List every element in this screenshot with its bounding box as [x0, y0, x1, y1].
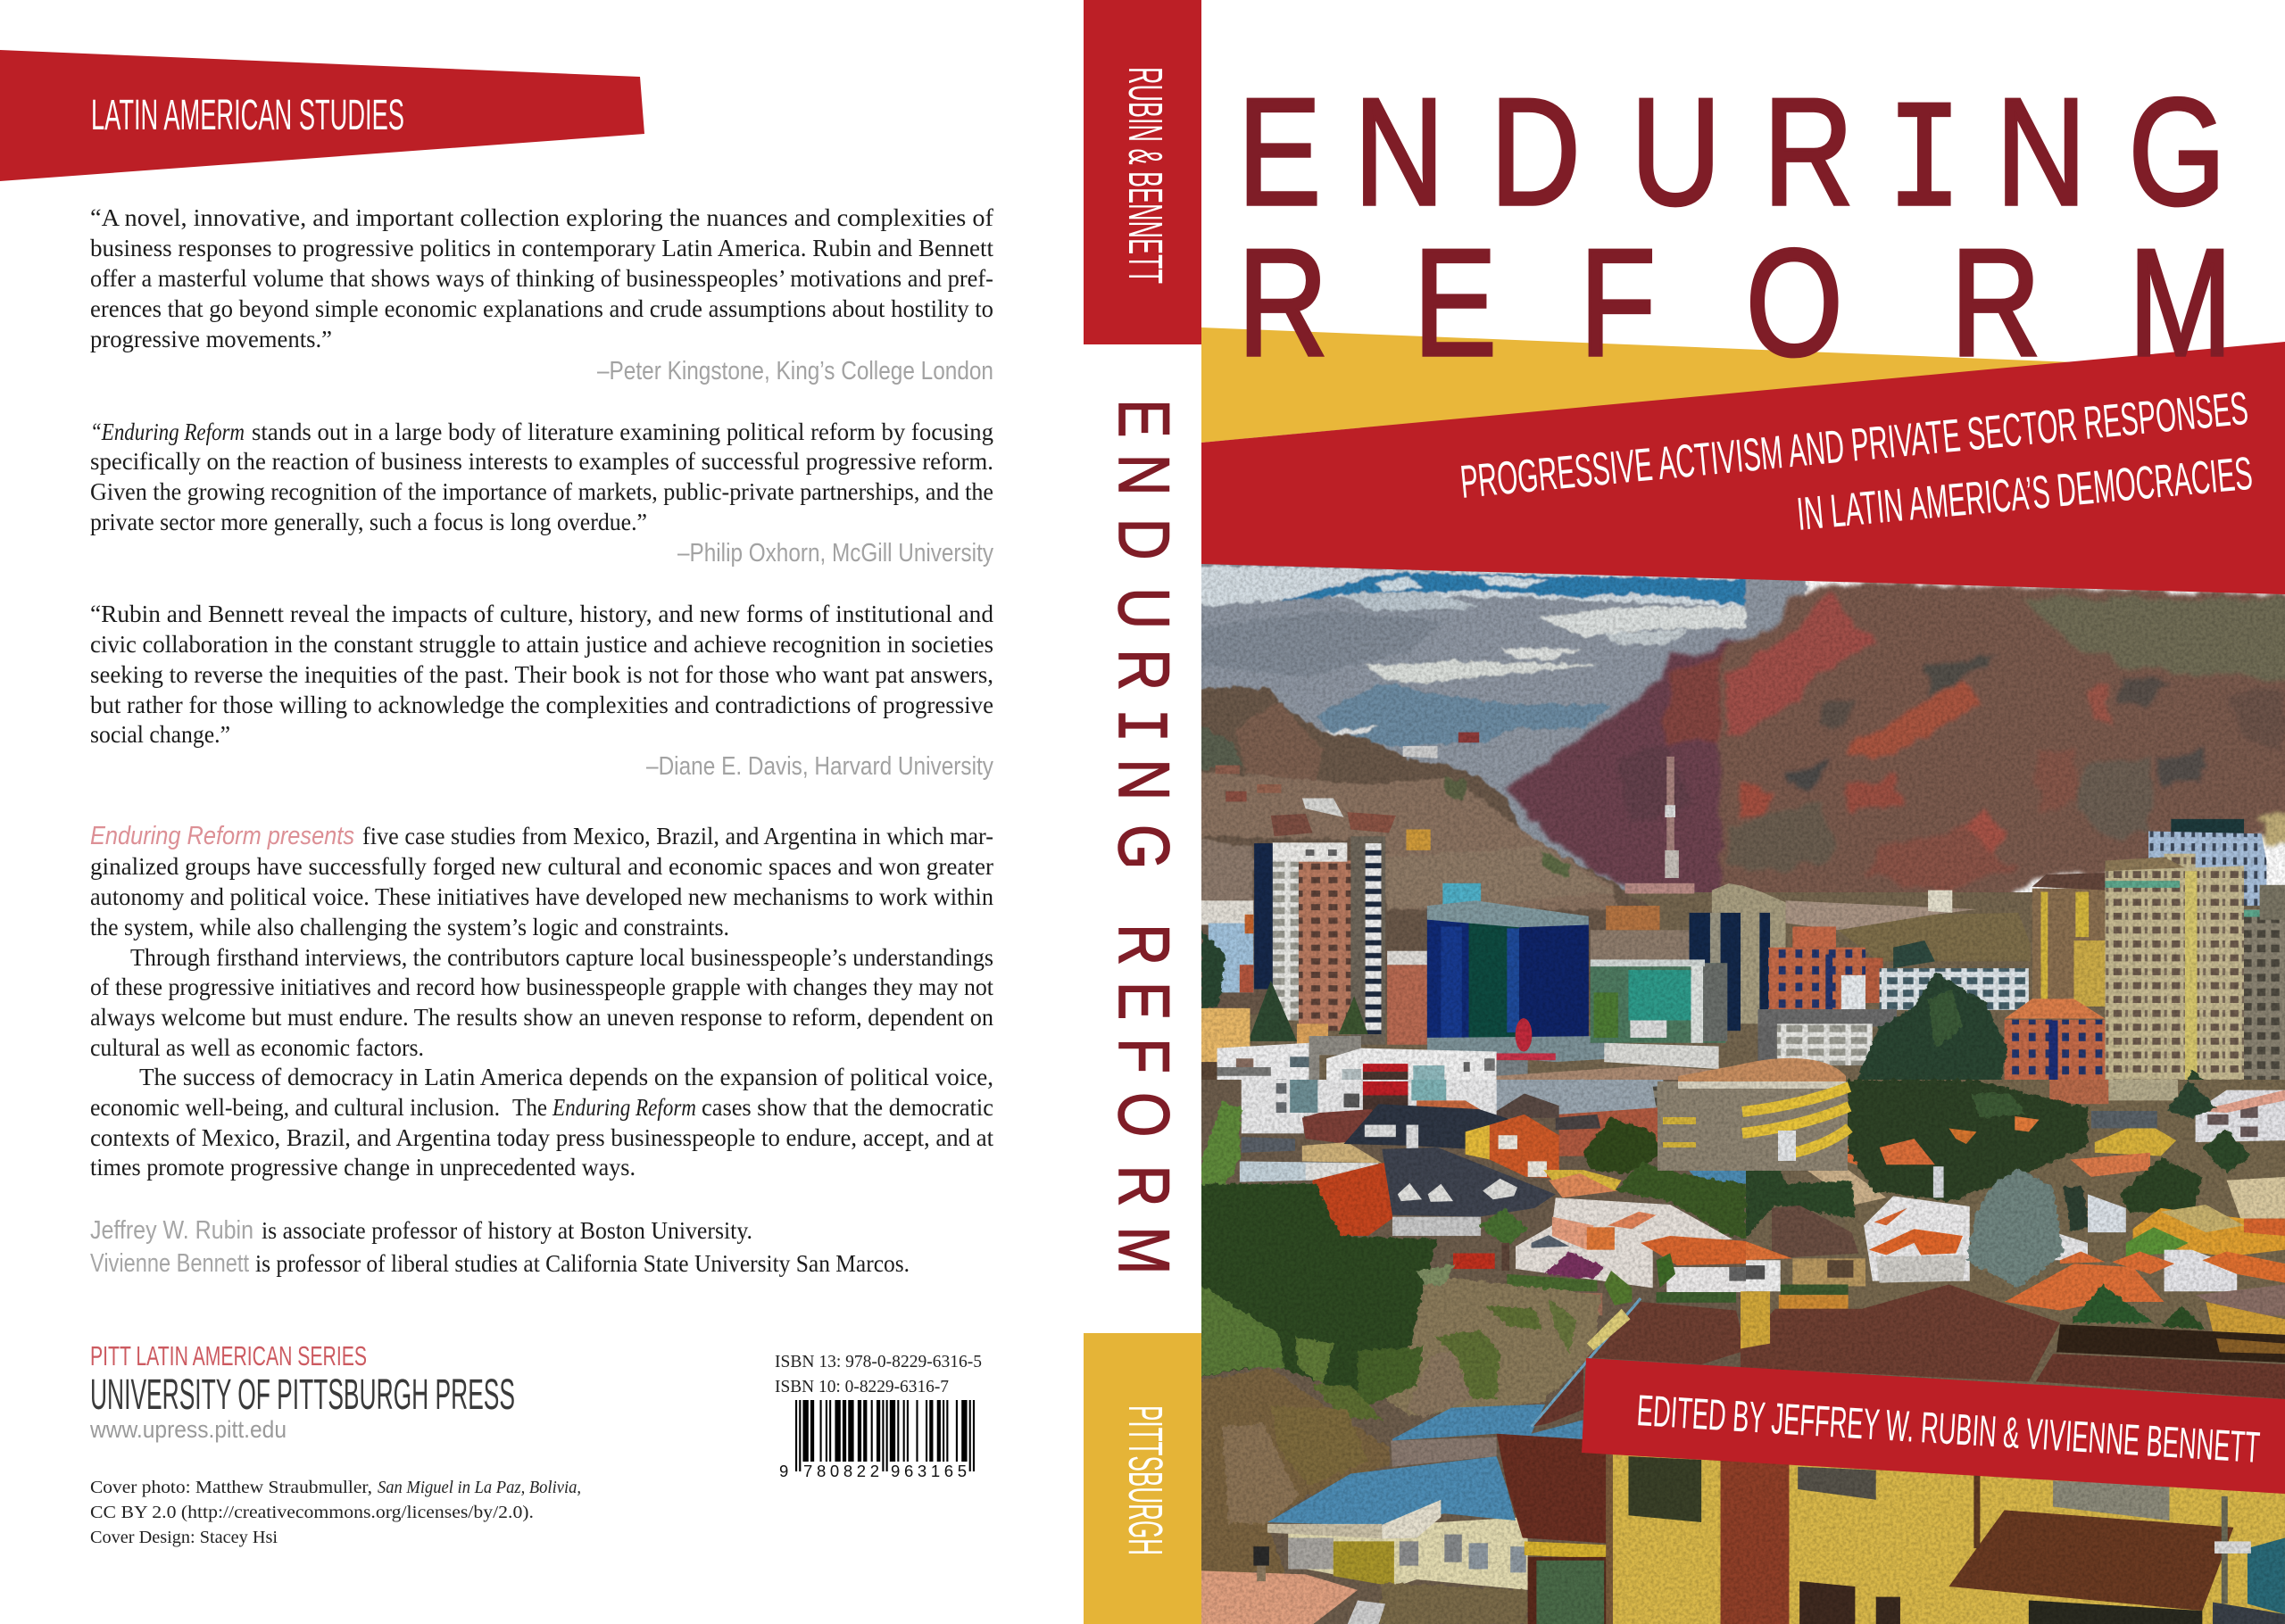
book description: of these progressive initiatives and record how businesspeople grapple with changes they may not: [90, 974, 993, 1000]
barcode: [779, 1400, 975, 1480]
base fill behind the city: [1201, 892, 2285, 1624]
hillside houses: [1216, 733, 1694, 893]
title: Enduring Reform: I: [1887, 78, 1962, 250]
panel: spine: [1084, 0, 1201, 1624]
quote 3: civic collaboration in the constant struggle to attain justice and achieve recognition in societies: [90, 631, 993, 658]
title: Enduring Reform: NG: [1996, 67, 2226, 237]
publisher block: www.upress.pitt.edu: [89, 1416, 287, 1443]
quote 3: but rather for those willing to acknowledge the complexities and contradictions of progressive: [90, 692, 993, 718]
spine title: NG REFORM: [1103, 758, 1184, 1274]
book description: five case studies from Mexico, Brazil, and Argentina in which mar-: [362, 823, 993, 849]
quote 1: erences that go beyond simple economic explanations and crude assumptions about hostility to: [90, 295, 993, 322]
quote 2: “Enduring Reform: [90, 418, 245, 445]
barcode: 780822: [803, 1462, 879, 1480]
quote 3: social change.”: [90, 721, 230, 748]
book description: Enduring Reform presents: [90, 822, 354, 850]
book description: times promote progressive change in unprecedented ways.: [90, 1154, 636, 1181]
yellow house wall: [1525, 1454, 1746, 1624]
green hillside: [1194, 1100, 1600, 1420]
panel: front cover: [1181, 67, 2285, 1624]
red mountain: [1503, 583, 2285, 913]
quote 1: offer a masterful volume that shows ways of thinking of businesspeoples’ motivations and pref-: [90, 265, 993, 292]
cover credits: Cover Design: Stacey Hsi: [90, 1528, 278, 1547]
title: Enduring Reform: [1238, 67, 2232, 388]
author bios: Vivienne Bennett: [90, 1249, 249, 1278]
book description: economic well-being, and cultural inclusion.: [90, 1094, 500, 1121]
title: Enduring Reform: REFORM: [1238, 218, 2232, 388]
publisher block: UNIVERSITY OF PITTSBURGH PRESS: [90, 1371, 515, 1419]
big house, bottom right: [1741, 1285, 2285, 1624]
blue-grey cypress tree: [1966, 1168, 2064, 1288]
orange roof, bottom left: [1201, 1546, 1358, 1624]
cover credits: Cover photo: Matthew Straubmuller,: [90, 1478, 372, 1497]
banner: Latin American Studies: LATIN AMERICAN STUDIES: [91, 92, 404, 139]
book description: always welcome but must endure. The results show an uneven response to reform, dependent on: [90, 1004, 993, 1031]
spine publisher block: [1084, 1333, 1201, 1624]
quote 1: business responses to progressive politics in contemporary Latin America. Rubin and Bennett: [90, 235, 993, 261]
spine author block: RUBIN & BENNETT: [1118, 67, 1172, 284]
quote 3: “Rubin and Bennett reveal the impacts of culture, history, and new forms of institutional and: [90, 601, 993, 627]
barcode: 9: [779, 1462, 788, 1480]
author bios: is professor of liberal studies at California State University San Marcos.: [255, 1250, 910, 1277]
quote 2: –Philip Oxhorn, McGill University: [677, 539, 993, 568]
ISBN numbers: ISBN 13: 978-0-8229-6316-5: [775, 1352, 982, 1371]
quote 1: “A novel, innovative, and important collection exploring the nuances and complexities of: [90, 204, 993, 231]
dark glass twin tower: [1690, 883, 1746, 1031]
photo grain texture: [1201, 562, 2285, 1624]
quote 3: –Diane E. Davis, Harvard University: [646, 752, 993, 781]
distant snowy mountains: [1201, 564, 1808, 892]
barcode: 963165: [891, 1462, 967, 1480]
radio tower: [1665, 757, 1679, 878]
quote 3: [90, 601, 993, 781]
publisher block: PITT LATIN AMERICAN SERIES: [90, 1340, 367, 1371]
book description: Enduring Reform: [552, 1094, 696, 1121]
book description: The: [512, 1094, 547, 1121]
yellow tower: [2032, 873, 2105, 1007]
pale blue building: [2148, 819, 2266, 906]
book description: [90, 822, 993, 1181]
blue glass building: [1427, 883, 1615, 1062]
lower neighbourhood, centre right: [1741, 1080, 2285, 1344]
quote 2: specifically on the reaction of business interests to examples of successful progressive reform.: [90, 448, 993, 475]
quote 2: [90, 418, 993, 568]
book description: cases show that the democratic: [702, 1094, 993, 1121]
yellow wedge: [1201, 327, 2075, 443]
panel: back cover: [0, 50, 993, 1547]
big tan tower: [2105, 854, 2244, 1117]
author bios: Jeffrey W. Rubin: [90, 1216, 253, 1245]
banner: Latin American Studies: [0, 50, 644, 181]
book description: Through firsthand interviews, the contributors capture local businesspeople’s understandings: [130, 944, 993, 971]
rotunda building with yellow balconies: [1658, 1058, 1849, 1171]
white low-rise buildings: [1201, 1036, 1746, 1117]
tree canopy: [1741, 1080, 2251, 1243]
spine author block: [1084, 0, 1201, 344]
book description: ginalized groups have successfully forged new cultural and economic spaces and won greater: [90, 853, 993, 880]
tall brick tower: [1254, 836, 1385, 1045]
quote 3: seeking to reverse the inequities of the past. Their book is not for those who want pat answers,: [90, 661, 993, 688]
eucalyptus tree: [1855, 972, 2220, 1117]
reflective green building: [1591, 959, 1727, 1043]
cover credits: CC BY 2.0 (http://creativecommons.org/licenses/by/2.0).: [90, 1503, 534, 1522]
cover credits: [90, 1478, 581, 1547]
author bios: is associate professor of history at Boston University.: [262, 1217, 752, 1244]
author bios: [90, 1216, 910, 1278]
book description: the system, while also challenging the system’s logic and constraints.: [90, 914, 729, 940]
quote 2: stands out in a large body of literature examining political reform by focusing: [252, 418, 993, 445]
cover credits: San Miguel in La Paz, Bolivia,: [378, 1478, 581, 1497]
quote 1: –Peter Kingstone, King’s College London: [597, 357, 993, 385]
subtitle band: [1201, 342, 2285, 594]
title: Enduring Reform: ENDUR: [1238, 67, 1854, 237]
book description: cultural as well as economic factors.: [90, 1034, 424, 1061]
quote 1: progressive movements.”: [90, 326, 332, 352]
large brown roofs: [1497, 1298, 1746, 1543]
book description: The success of democracy in Latin America depends on the expansion of political voice,: [139, 1064, 993, 1090]
lower neighbourhood, centre left: [1194, 1080, 1746, 1624]
eroded rock face: [1194, 1350, 1472, 1572]
editors band: [1582, 1358, 2285, 1494]
spine title: ENDUR: [1103, 399, 1184, 691]
book description: contexts of Mexico, Brazil, and Argentina today press businesspeople to endure, accept, and at: [90, 1124, 993, 1151]
book description: autonomy and political voice. These initiatives have developed new mechanisms to work within: [90, 883, 993, 910]
quote 2: private sector more generally, such a focus is long overdue.”: [90, 509, 647, 535]
right side high-rises: [1741, 819, 2285, 1117]
left brown hills: [1187, 687, 1653, 1014]
midtown high-rises: [1201, 836, 1746, 1062]
cover photo: La Paz city and mountains: [1181, 542, 2285, 1624]
ISBN numbers: [775, 1352, 982, 1396]
quote 1: [90, 204, 993, 385]
ISBN numbers: ISBN 10: 0-8229-6316-7: [775, 1377, 949, 1396]
blue roofs and pale houses: [1267, 1404, 1583, 1590]
spine title: I: [1097, 708, 1178, 742]
white house with orange awnings: [1864, 1196, 1970, 1283]
quote 2: Given the growing recognition of the importance of markets, public-private partnerships, and the: [90, 478, 993, 505]
white houses and orange roofs: [1516, 1197, 1746, 1292]
publisher block: [89, 1340, 515, 1443]
